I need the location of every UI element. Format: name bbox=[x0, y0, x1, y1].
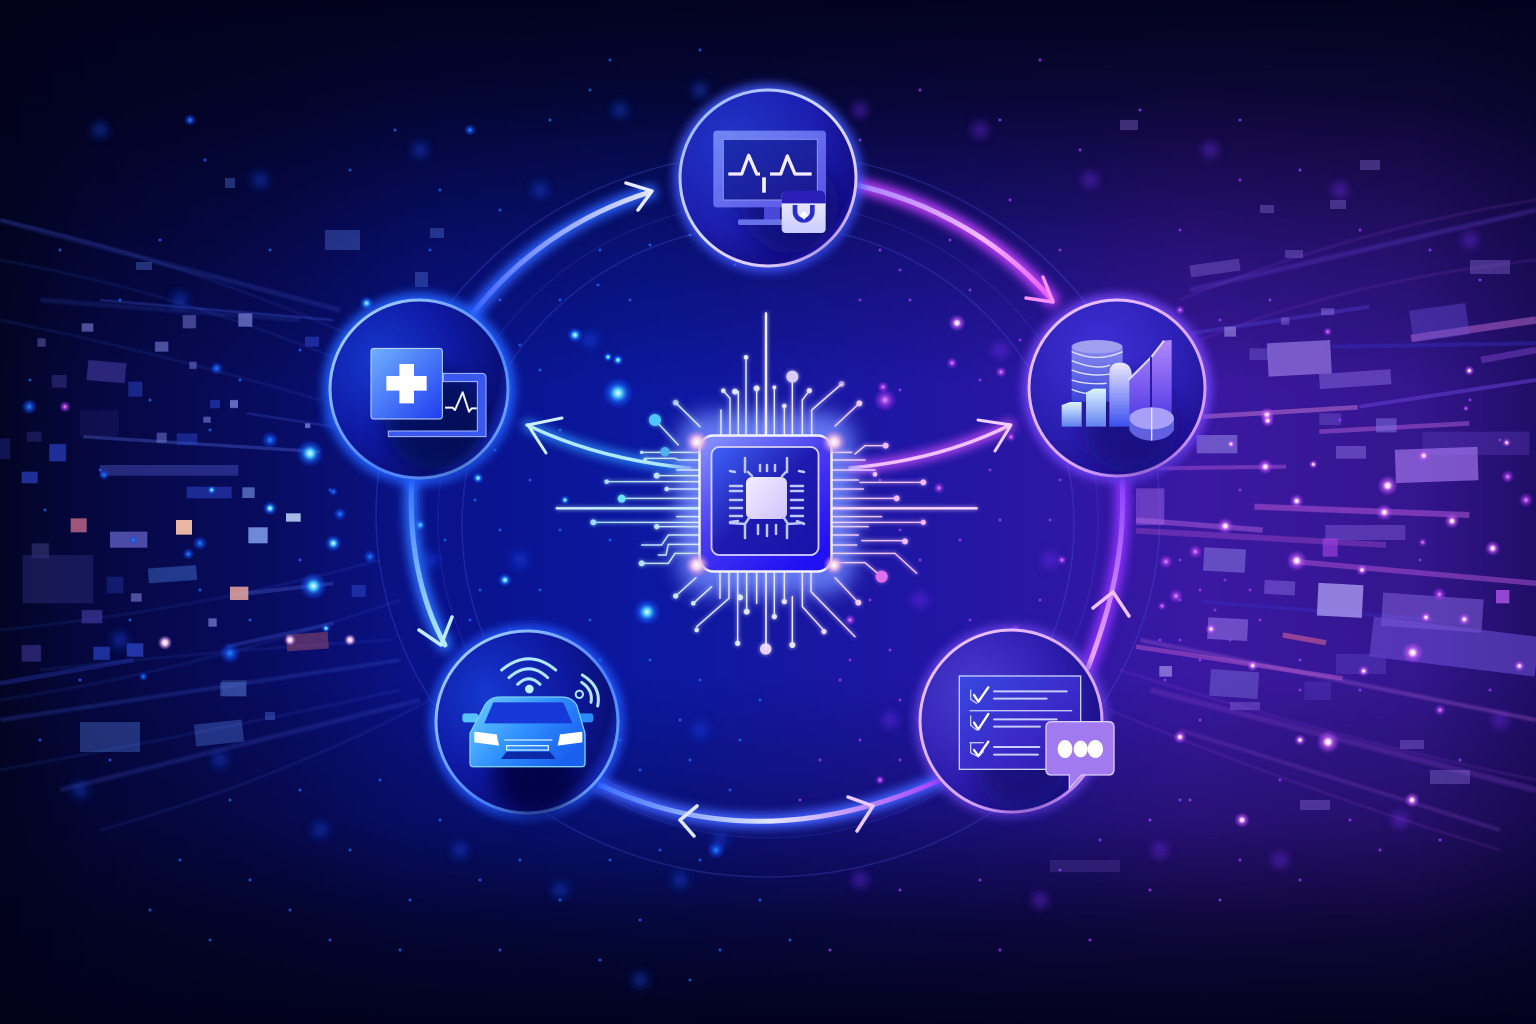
icon: monitor with heartbeat and medical case bbox=[713, 131, 826, 233]
chip core bbox=[746, 477, 787, 519]
arc: bottom-right node to right node bbox=[1088, 480, 1129, 668]
chip inner plate bbox=[712, 447, 818, 555]
arc: top node to right node bbox=[856, 185, 1053, 302]
right streak bands bbox=[1136, 307, 1536, 678]
large trace nodes bbox=[618, 371, 888, 655]
circuit traces glow bbox=[550, 313, 983, 655]
faint inner orbit rings bbox=[376, 153, 1160, 877]
arc: left node to bottom-left node bbox=[411, 478, 452, 645]
right glowing orbs bbox=[1157, 327, 1533, 677]
node: data analytics (right) bbox=[1023, 294, 1211, 482]
chip inner pins bbox=[730, 458, 804, 538]
arc: bottom bbox=[600, 780, 940, 836]
arc: left to top node bbox=[472, 183, 652, 315]
central AI chip bbox=[550, 313, 983, 655]
outer scattered glowing orbs bbox=[1173, 305, 1446, 828]
main bright axis lines bbox=[550, 313, 983, 649]
left blocks bbox=[0, 313, 366, 697]
chip corner glints bbox=[684, 429, 847, 578]
icon: database, bars and pie bbox=[1062, 340, 1174, 441]
outer streaks beyond zoomed regions bbox=[0, 210, 1536, 830]
node: medical monitor (top) bbox=[674, 84, 862, 272]
circuit traces bbox=[550, 313, 983, 655]
central arrows from chip bbox=[527, 418, 1011, 468]
interior and central orbs bbox=[184, 114, 1067, 859]
left streak bands bbox=[0, 300, 333, 683]
icon: car with wireless signals bbox=[462, 659, 598, 767]
chip glow bbox=[678, 413, 854, 594]
left glowing orbs bbox=[21, 296, 377, 681]
background light streaks bbox=[0, 200, 1536, 850]
node: connected car (bottom left) bbox=[430, 625, 624, 819]
background data blocks bbox=[0, 120, 1536, 872]
node: checklist with chat (bottom right) bbox=[915, 625, 1114, 817]
right outer blocks bbox=[1050, 120, 1510, 872]
node: medical cross and vitals (left) bbox=[323, 293, 515, 485]
right blocks bbox=[1136, 303, 1536, 700]
cycle arcs bbox=[411, 183, 1129, 836]
icon: cross card and vitals screen bbox=[371, 348, 486, 437]
left outer blocks bbox=[80, 178, 444, 752]
chip body bbox=[700, 436, 832, 572]
icon: checklist and speech bubble bbox=[959, 676, 1114, 788]
